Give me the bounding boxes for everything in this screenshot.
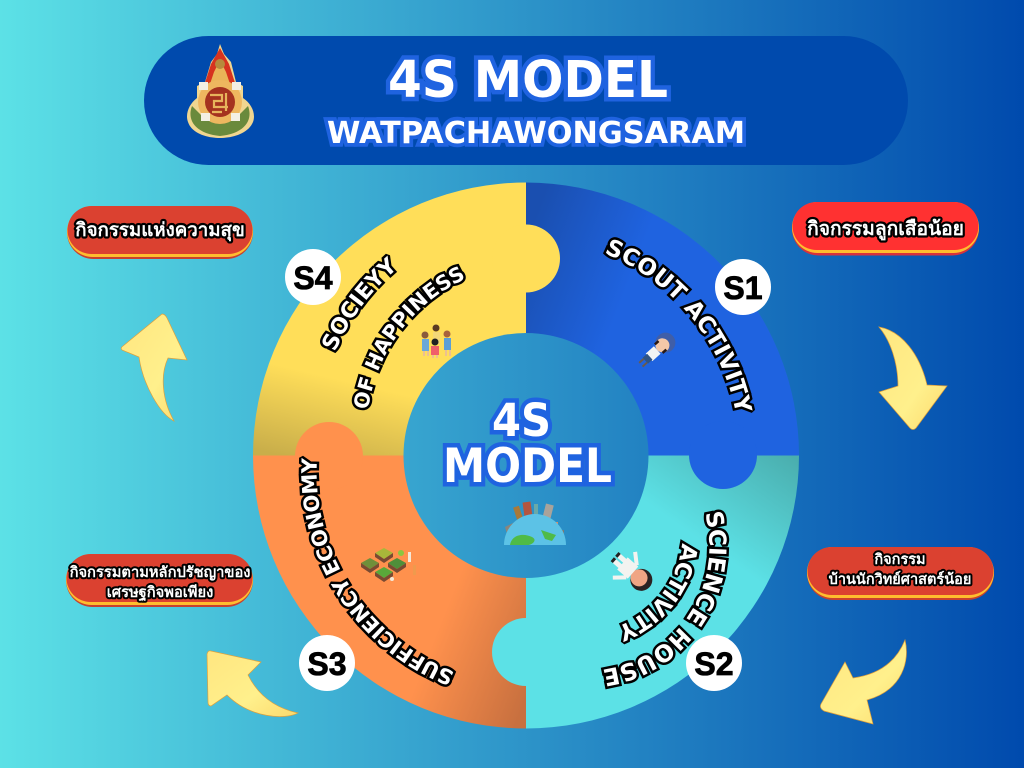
puzzle tab: blue <box>689 421 757 489</box>
puzzle tab: teal <box>492 618 560 686</box>
arrow: up-left, bottom left <box>207 651 298 717</box>
badge S2 <box>686 635 742 691</box>
curved label: societyy: SOCIEYY <box>320 254 398 354</box>
icon: farm plots <box>361 548 416 582</box>
callout: science house activity <box>807 547 994 600</box>
arrow: up, top left <box>121 314 187 421</box>
callout: scout activity: กิจกรรมลูกเสือน้อย <box>807 218 964 241</box>
badge S3: S3 <box>307 646 347 682</box>
arrow: down-left, bottom right <box>820 640 906 724</box>
icon: globe with landmarks <box>504 501 566 545</box>
badge S2: S2 <box>694 646 734 682</box>
badge S4: S4 <box>293 260 333 296</box>
callout: science house activity: บ้านนักวิทย์ศาสตร์น้อย <box>829 570 971 588</box>
icon: scientist child <box>605 545 661 600</box>
panel: S3 quadrant <box>253 456 526 728</box>
curved label: sufficiency economy: SUFFICIENCY ECONOMY <box>298 456 456 687</box>
callout: sufficiency activity: กิจกรรมตามหลักปรัชญาของ <box>69 564 250 581</box>
puzzle circle <box>253 182 799 728</box>
puzzle tab: yellow <box>492 224 560 292</box>
center heading 4S: 4S <box>492 394 551 447</box>
badge S4 <box>285 249 341 305</box>
title: 4S MODEL <box>388 51 668 110</box>
puzzle tab: orange <box>295 422 363 490</box>
icon: scout child <box>634 329 680 372</box>
callout: happiness activity <box>67 206 253 259</box>
badge S1: S1 <box>723 270 763 306</box>
callout: scout activity <box>792 202 979 256</box>
curved label: of happiness: OF HAPPINESS <box>352 264 466 410</box>
badge S3 <box>299 635 355 691</box>
callout: sufficiency activity: เศรษฐกิจพอเพียง <box>107 584 213 602</box>
arrow: down, top right <box>879 327 947 430</box>
callout: happiness activity: กิจกรรมแห่งความสุข <box>75 219 245 242</box>
panel: S1 quadrant <box>526 182 799 456</box>
badge S1 <box>715 259 771 315</box>
curved label: activity: ACTIVITY <box>618 539 700 644</box>
subtitle: WATPACHAWONGSARAM <box>327 116 745 151</box>
header banner <box>144 36 908 165</box>
center circle <box>404 333 648 578</box>
center heading MODEL: MODEL <box>443 439 612 494</box>
icon: children holding hands <box>422 324 451 358</box>
panel: S4 quadrant <box>253 182 526 456</box>
icon: school emblem <box>187 44 254 138</box>
curved label: scout activity: SCOUT ACTIVITY <box>603 237 755 413</box>
panel: S2 quadrant <box>526 456 799 728</box>
callout: sufficiency activity <box>66 554 253 607</box>
curved label: science house: SCIENCE HOUSE <box>600 510 730 690</box>
callout: science house activity: กิจกรรม <box>874 551 926 568</box>
